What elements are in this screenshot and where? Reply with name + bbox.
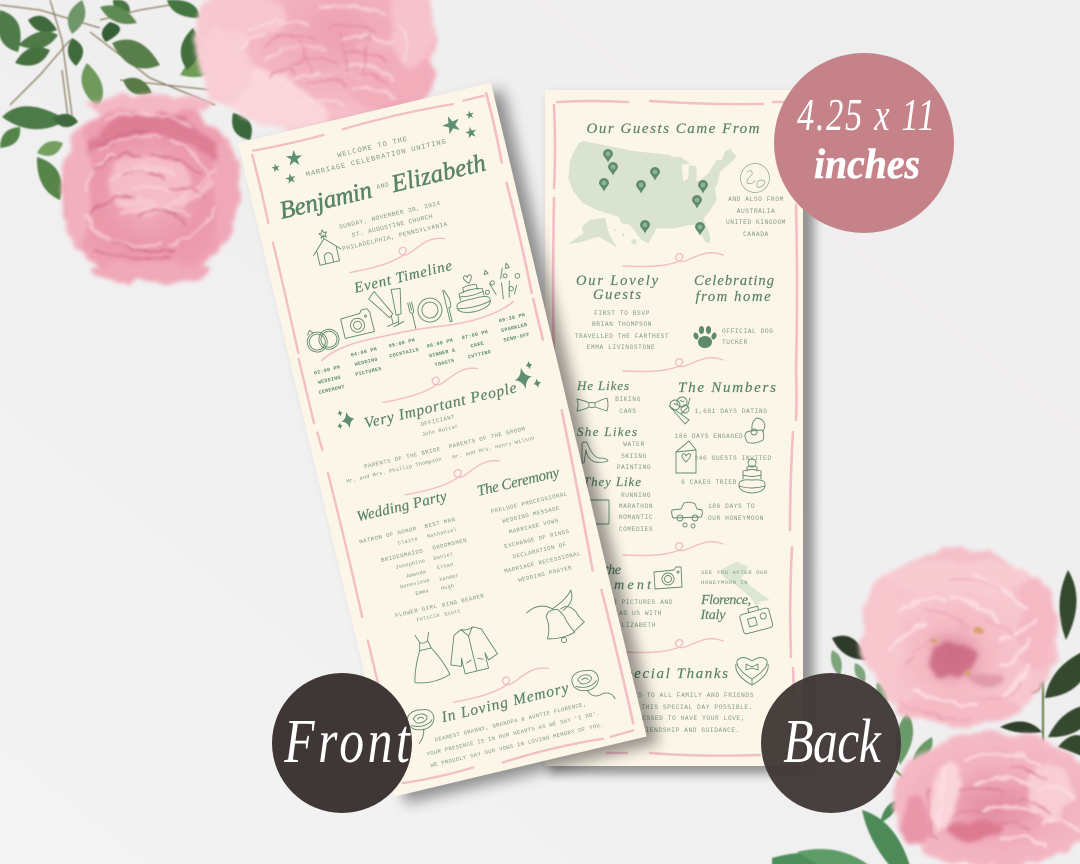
text: memory message: DEAREST GRANNY, GRANDPA & AUNTIE FLORENCE, [434, 701, 587, 744]
text: days engaged: 186 DAYS ENGAGED [675, 433, 743, 440]
title: couple names: Elizabeth [388, 150, 488, 198]
icon: rose right [570, 665, 615, 708]
text: ceremony order: MARRIAGE RECESSIONAL [503, 550, 582, 575]
card shadow: front [250, 90, 659, 804]
text: wedding party names: RING BEARER [441, 592, 485, 609]
map of Italy [720, 562, 770, 607]
timeline labels: 06:00 PM [426, 338, 454, 350]
divider swirl [623, 253, 723, 267]
heading: celebrating from home: from home [696, 289, 771, 305]
text: thanks message: THANKS TO ALL FAMILY AND FRIENDS [617, 692, 754, 699]
text: also from: UNITED KINGDOM [726, 219, 786, 226]
peony: lower right upper [862, 550, 1058, 726]
heading: the numbers: The Numbers [678, 380, 776, 396]
text: guest awards: TRAVELLED THE FARTHEST [575, 333, 669, 340]
icon: champagne glasses [367, 285, 408, 331]
text: wedding party names: Ethan [436, 562, 454, 571]
icon: church [308, 227, 343, 266]
text: wedding party names: Daniel [433, 551, 454, 562]
text: days dating: 1,681 DAYS DATING [695, 408, 767, 415]
icon: greeting card [676, 441, 696, 473]
icon: wedding dress [404, 630, 451, 686]
section: they like: RUNNING [621, 492, 651, 499]
text: official dog [722, 328, 774, 346]
text: official dog: TUCKER [722, 339, 748, 346]
heading: florence italy: Italy [700, 608, 726, 623]
heading: our guests came from: Our Guests Came From [586, 121, 760, 137]
icon: paw [693, 326, 717, 348]
icon: rose left [406, 707, 439, 745]
map location pins [599, 149, 708, 236]
heading: florence italy: Florence, [700, 593, 751, 608]
badge: size [774, 53, 954, 233]
panel: front card [238, 83, 647, 797]
text: wedding party names: Emma [415, 588, 429, 597]
timeline labels: 04:00 PM [350, 346, 378, 359]
section: she likes: PAINTING [617, 464, 651, 471]
divider swirl [380, 366, 480, 403]
timeline labels: 05:00 PM [388, 337, 416, 349]
heading: florence italy [700, 593, 751, 623]
peony: left round [61, 95, 239, 283]
section: he likes [576, 378, 641, 415]
heading: event timeline: Event Timeline [352, 258, 454, 297]
text: share your pictures: TAG US WITH [615, 610, 662, 617]
section: they like: They Like [583, 474, 641, 489]
divider swirl [623, 542, 723, 556]
badge: back [761, 673, 901, 813]
heading: special thanks: Special Thanks [616, 666, 728, 682]
text: date and venue [336, 199, 448, 253]
text: wedding party names: Hugh [440, 583, 455, 592]
text: ceremony order: EXCHANGE OF RINGS [504, 528, 570, 550]
timeline labels: WEDDING [354, 357, 378, 368]
timeline curve [319, 302, 516, 361]
timeline labels: COCKTAILS [389, 347, 420, 360]
divider swirl [623, 358, 723, 372]
heading: our lovely guests: Our Lovely [576, 273, 659, 289]
text: guest awards [575, 310, 669, 351]
text: share your pictures: BENJAMIN & ELIZABETH [570, 622, 656, 629]
title: couple names: Benjamin [277, 177, 375, 225]
text: wedding party names: Amanda [406, 569, 427, 580]
text: also from: AND ALSO FROM [728, 196, 784, 203]
text: wedding party names: Nathaniel [427, 527, 458, 540]
text: also from [726, 196, 786, 238]
icon: sparklers [480, 261, 524, 302]
icon: heart box [736, 658, 768, 685]
icon: camera [654, 567, 682, 589]
heading: capture the moment: Moment [588, 578, 652, 593]
text: days to honeymoon: 186 DAYS TO [708, 503, 755, 510]
sparkles [333, 359, 542, 435]
icon: globe [740, 164, 770, 192]
badge: front [272, 673, 412, 813]
text: ceremony order [489, 490, 585, 587]
text: wedding party names: Genevieve [400, 578, 431, 590]
text: days to honeymoon [708, 503, 764, 522]
section: she likes [577, 424, 651, 471]
timeline labels: 09:30 PM [498, 312, 526, 324]
section: they like: COMEDIES [619, 526, 653, 533]
text: see you after [701, 569, 768, 586]
text: parents of the groom: Mr. and Mrs. Henry Wilson [452, 435, 535, 461]
badge: size: 4.25 x 11 [797, 89, 935, 140]
panel: back card [545, 90, 803, 766]
heading: capture the moment [559, 563, 652, 593]
text: wedding party names: Josephine [395, 558, 426, 571]
text: also from: AUSTRALIA [737, 208, 775, 215]
text: wedding party names: BEST MAN [424, 516, 456, 530]
divider swirl [402, 459, 502, 495]
divider swirl [347, 236, 447, 273]
text: wedding party names: GROOMSMEN [432, 537, 468, 552]
icon: tiered cake [739, 459, 765, 493]
section: they like: ROMANTIC [619, 514, 653, 521]
text: wedding party names: Xander [439, 573, 460, 583]
text: wedding party names: BRIDESMAIDS [380, 547, 424, 564]
text: ceremony order: DECLARATION OF [512, 541, 567, 560]
icon: ring box [745, 418, 765, 443]
card shadow: back [550, 96, 814, 774]
badge: front: Front [283, 708, 411, 776]
timeline labels: 07:00 PM [461, 329, 489, 341]
timeline labels: CUTTING [468, 349, 492, 360]
section: she likes: She Likes [577, 424, 637, 439]
title: couple names [277, 150, 488, 225]
text: wedding party names: Scott [444, 608, 462, 618]
peony: top centre [195, 0, 435, 146]
text: officiant: OFFICIANT [420, 413, 456, 428]
text: ceremony order: PRELUDE PROCESSIONAL [490, 490, 568, 515]
heading: celebrating from home [694, 273, 774, 305]
timeline labels: DINNER & [429, 347, 457, 359]
heading: celebrating from home: Celebrating [694, 273, 774, 289]
timeline labels: CEREMONY [318, 384, 346, 396]
stars left [268, 147, 309, 187]
icon: rings [305, 324, 341, 354]
icon: wedding cake [450, 271, 492, 315]
section: he likes: He Likes [576, 378, 629, 393]
timeline labels: WEDDING [317, 375, 342, 386]
badge: size: inches [814, 142, 920, 188]
peony: lower right lower [891, 732, 1080, 864]
icon: tuxedo jacket [443, 623, 500, 677]
icon: suitcase [738, 604, 773, 635]
text: official dog: OFFICIAL DOG [722, 328, 774, 335]
timeline labels: TOASTS [434, 358, 455, 368]
timeline labels: CAKE [470, 341, 485, 350]
heading: capture the moment: Capture the [559, 563, 621, 578]
text: date and venue: SUNDAY, NOVEMBER 30, 2024 [338, 200, 441, 231]
text: thanks message: WHO MADE THIS SPECIAL DAY POSSIBLE. [603, 704, 753, 711]
divider swirl [623, 639, 723, 653]
text: ceremony order: MARRIAGE VOWS [508, 517, 560, 536]
heading: wedding party: Wedding Party [355, 488, 449, 525]
text: wedding party names: Claire [397, 536, 419, 547]
text: ceremony order: WEDDING PRAYER [518, 564, 573, 584]
text: parents of the bride: Mr. and Mrs. Phillip Thompson [346, 456, 443, 485]
text: officiant: John Rutter [421, 424, 459, 438]
text: thanks message: SO BLESSED TO HAVE YOUR LOVE, [620, 715, 745, 722]
text: date and venue: ST. AUGUSTINE CHURCH [351, 213, 434, 239]
text: see you after: SEE YOU AFTER OUR [701, 569, 768, 576]
text: share your pictures: SHARE YOUR PICTURES AND [574, 599, 673, 606]
timeline labels: 02:00 PM [313, 365, 341, 377]
icon: wedding bells [524, 589, 588, 649]
section: she likes: SKIING [621, 453, 647, 460]
text: parents of the groom: PARENTS OF THE GROOM [448, 425, 526, 450]
text: officiant [419, 413, 459, 438]
heading: very important people: Very Important People [363, 379, 518, 432]
stars right [439, 109, 479, 144]
text: guests invited: 246 GUESTS INVITED [694, 455, 772, 462]
text: parents of the bride [343, 445, 444, 485]
timeline labels: SPARKLER [501, 322, 529, 334]
timeline labels: SEND-OFF [503, 332, 530, 344]
bottom right greenery [772, 570, 1080, 864]
section: they like: MARATHON [619, 503, 653, 510]
badge: back: Back [783, 708, 882, 776]
text: parents of the bride: PARENTS OF THE BRIDE [363, 445, 442, 470]
text: days to honeymoon: OUR HONEYMOON [708, 515, 764, 522]
text: ceremony order: WEDDING MESSAGE [502, 504, 561, 525]
section: she likes: WATER [623, 441, 645, 448]
text: memory message: YOUR PRESENCE IS IN OUR HEARTS AS WE SAY 'I DO'. [426, 710, 601, 758]
front card hand-drawn border [249, 93, 638, 787]
text: cakes tried: 6 CAKES TRIED [681, 479, 737, 486]
top left greenery [0, 0, 252, 200]
heading: in loving memory: In Loving Memory [439, 680, 570, 726]
text: wedding party names: FLOWER GIRL [394, 602, 438, 619]
section: he likes: BIKING [615, 396, 641, 403]
text: wedding party names: Felicia [416, 612, 440, 624]
text: memory message [423, 698, 605, 769]
text: also from: CANADA [743, 231, 769, 238]
text: guest awards: EMMA LIVINGSTONE [587, 344, 655, 351]
section: they like [583, 474, 653, 533]
heading: the ceremony: The Ceremony [476, 465, 561, 500]
text: thanks message [603, 692, 754, 734]
icon: place setting [407, 290, 455, 330]
heading: our lovely guests: Guests [593, 287, 641, 303]
text: date and venue: PHILADELPHIA, PENNSYLVANIA [342, 221, 448, 253]
text: parents of the groom [448, 424, 535, 461]
text: guest awards: BRIAN THOMPSON [592, 321, 652, 328]
title: couple names: AND [376, 181, 390, 191]
divider swirl [450, 666, 551, 703]
text: welcome: MARRIAGE CELEBRATION UNITING [305, 138, 448, 179]
timeline labels: PICTURES [355, 366, 382, 378]
text: welcome: WELCOME TO THE [337, 136, 409, 160]
text: memory message: WE PROUDLY SAY OUR VOWS IN LOVING MEMORY OF YOU. [430, 721, 605, 769]
back card hand-drawn border [553, 101, 797, 756]
timeline labels [311, 311, 533, 396]
text: wedding party names [359, 514, 487, 633]
text: see you after: HONEYMOON IN [701, 579, 748, 586]
text: guest awards: FIRST TO RSVP [594, 310, 650, 317]
map of United States [568, 141, 737, 248]
section: he likes: CARS [619, 408, 637, 415]
heading: our lovely guests [576, 273, 659, 303]
text: share your pictures [570, 599, 673, 629]
text: wedding party names: MATRON OF HONOR [359, 525, 418, 546]
text: thanks message: FRIENDSHIP AND GUIDANCE. [637, 727, 740, 734]
icon: camera [340, 308, 374, 338]
icon: just married car [672, 502, 702, 528]
icon: bouquet [669, 397, 690, 424]
